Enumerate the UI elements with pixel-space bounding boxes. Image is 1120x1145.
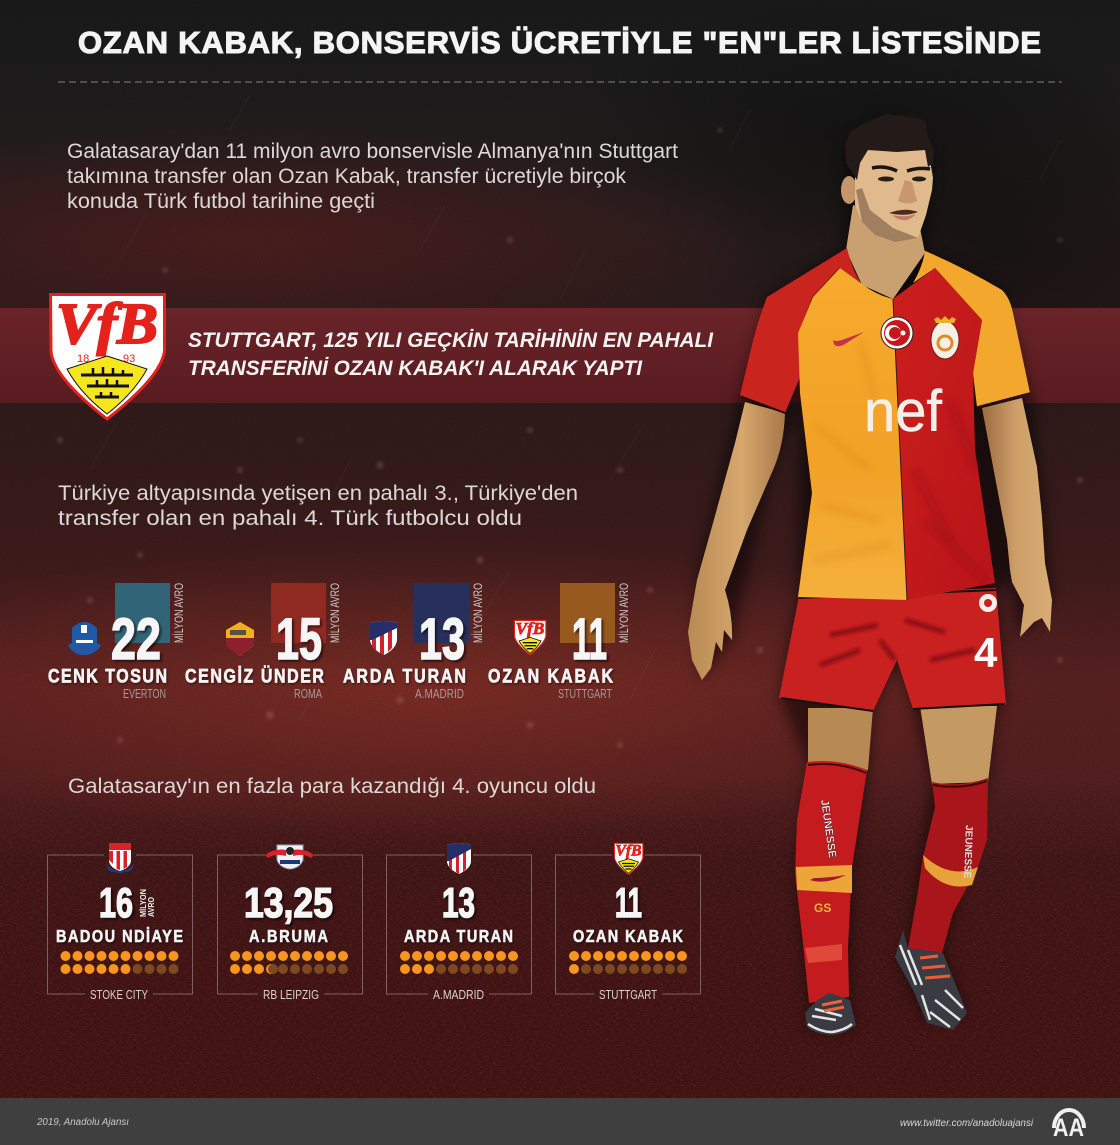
right sleeve bbox=[913, 250, 1030, 407]
icon: VfB crest bbox=[514, 619, 546, 655]
card: Badou Ndiaye bbox=[48, 843, 192, 1002]
panel: Cengiz Ünder: CENGİZ ÜNDER bbox=[185, 665, 324, 687]
dots: 13 of 20 scale bbox=[400, 951, 518, 974]
dots: 11 of 20 scale bbox=[569, 951, 687, 974]
face bbox=[855, 148, 933, 242]
card: A.Bruma: 13,25 bbox=[244, 879, 333, 926]
footer bbox=[0, 1098, 1120, 1145]
card: Arda Turan: 13 bbox=[442, 879, 475, 926]
icon: RB Leipzig crest bbox=[265, 845, 314, 869]
icon: Stoke crest bbox=[106, 843, 134, 873]
icon: VfB crest small bbox=[614, 842, 643, 874]
left sleeve bbox=[740, 248, 862, 413]
Turkish flag badge bbox=[881, 317, 913, 349]
panel: Cengiz Ünder: MİLYON AVRO bbox=[329, 583, 342, 643]
right sock: JEUNESSE bbox=[961, 825, 974, 879]
right boot bbox=[895, 930, 967, 1030]
card: Badou Ndiaye: 16 bbox=[99, 879, 133, 926]
section text: Galatasaray sales: Galatasaray'ın en fazla para kazandığı 4. oyuncu oldu bbox=[68, 774, 596, 798]
left arm bbox=[688, 402, 785, 680]
panel: Arda Turan: MİLYON AVRO bbox=[472, 583, 485, 643]
right arm bbox=[982, 398, 1052, 637]
card: Badou Ndiaye: STOKE CITY bbox=[90, 987, 148, 1002]
left knee bbox=[808, 708, 873, 770]
card: Arda Turan: A.MADRID bbox=[433, 987, 484, 1002]
dots: 16 of 20 scale bbox=[60, 951, 178, 974]
intro text: takımına transfer olan Ozan Kabak, transfer ücretiyle birçok bbox=[67, 165, 627, 188]
panel: Ozan Kabak: MİLYON AVRO bbox=[618, 583, 631, 643]
panel: Cengiz Ünder: 15 bbox=[276, 607, 322, 672]
nike swoosh bbox=[833, 332, 864, 346]
icon: VfB crest small: VfB bbox=[616, 842, 642, 860]
right knee bbox=[920, 706, 997, 784]
icon: VfB Stuttgart crest large bbox=[50, 291, 164, 419]
Galatasaray badge bbox=[931, 316, 959, 359]
hair bbox=[845, 114, 934, 180]
icon: Roma crest bbox=[226, 622, 254, 656]
banner text bbox=[188, 329, 714, 380]
intro text bbox=[67, 140, 678, 213]
left sock: GS bbox=[814, 901, 831, 915]
panel: Ozan Kabak bbox=[488, 583, 631, 701]
panel: Cengiz Ünder: ROMA bbox=[294, 686, 322, 701]
panel: Cenk Tosun: 22 bbox=[111, 607, 161, 672]
panel: Cenk Tosun: MİLYON AVRO bbox=[173, 583, 186, 643]
card: Ozan Kabak: OZAN KABAK bbox=[573, 928, 683, 946]
ear bbox=[841, 176, 857, 204]
sponsor nef: nef bbox=[864, 379, 943, 444]
icon: VfB Stuttgart crest large: VfB bbox=[56, 291, 158, 356]
footer: 2019, Anadolu Ajansı bbox=[36, 1117, 129, 1128]
icon: VfB crest: VfB bbox=[516, 619, 544, 638]
panel: Cenk Tosun: EVERTON bbox=[123, 686, 166, 701]
icon: Atletico crest bbox=[370, 621, 397, 655]
icon: Everton crest bbox=[68, 622, 101, 655]
section text: most expensive Turkish bbox=[58, 481, 578, 530]
section text: most expensive Turkish: transfer olan en pahalı 4. Türk futbolcu oldu bbox=[58, 506, 522, 530]
section text: most expensive Turkish: Türkiye altyapısında yetişen en pahalı 3., Türkiye'den bbox=[58, 481, 578, 505]
card: Badou Ndiaye: MİLYON bbox=[138, 889, 148, 917]
neck bbox=[846, 205, 925, 299]
panel: Cenk Tosun bbox=[48, 583, 186, 701]
jersey orange half bbox=[798, 268, 907, 600]
card: Ozan Kabak: 11 bbox=[615, 879, 642, 926]
panel: Arda Turan bbox=[343, 583, 485, 701]
intro text: Galatasaray'dan 11 milyon avro bonservisle Almanya'nın Stuttgart bbox=[67, 140, 678, 163]
icon: VfB Stuttgart crest large: 93 bbox=[123, 353, 135, 365]
panel: Cengiz Ünder bbox=[185, 583, 342, 701]
banner text: TRANSFERİNİ OZAN KABAK'I ALARAK YAPTI bbox=[188, 357, 643, 380]
banner text: STUTTGART, 125 YILI GEÇKİN TARİHİNİN EN PAHALI bbox=[188, 329, 714, 352]
intro text: konuda Türk futbol tarihine geçti bbox=[67, 190, 375, 213]
icon: Anadolu Agency logo: AA bbox=[1053, 1114, 1084, 1142]
shorts bbox=[779, 588, 1006, 711]
icon: VfB Stuttgart crest large: 18 bbox=[77, 353, 89, 365]
dots: 13,25 of 20 scale bbox=[230, 951, 348, 974]
card: Arda Turan: ARDA TURAN bbox=[404, 928, 513, 946]
right sock bbox=[908, 778, 988, 953]
panel: Ozan Kabak: STUTTGART bbox=[558, 686, 612, 701]
jersey red half bbox=[893, 268, 995, 600]
card: Ozan Kabak: STUTTGART bbox=[599, 987, 657, 1002]
icon: Atletico crest small bbox=[447, 843, 471, 874]
shorts: 4 bbox=[974, 629, 998, 676]
panel: Arda Turan: A.MADRID bbox=[415, 686, 464, 701]
left boot bbox=[805, 993, 856, 1035]
left sock bbox=[795, 761, 867, 1003]
player illustration bbox=[688, 114, 1052, 1035]
card: Badou Ndiaye: BADOU NDİAYE bbox=[56, 927, 183, 946]
card: Arda Turan bbox=[386, 843, 532, 1002]
panel: Ozan Kabak: 11 bbox=[572, 607, 607, 672]
banner bbox=[0, 308, 1120, 403]
card: A.Bruma bbox=[218, 845, 362, 1002]
left sock: JEUNESSE bbox=[818, 799, 838, 859]
card: A.Bruma: RB LEIPZIG bbox=[263, 987, 319, 1002]
panel: Cenk Tosun: CENK TOSUN bbox=[48, 665, 167, 687]
panel: Ozan Kabak: OZAN KABAK bbox=[488, 665, 613, 687]
panel: Arda Turan: ARDA TURAN bbox=[343, 665, 466, 687]
title: OZAN KABAK, BONSERVİS ÜCRETİYLE "EN"LER LİSTESİNDE bbox=[78, 25, 1041, 60]
panel: Arda Turan: 13 bbox=[419, 607, 465, 672]
card: Badou Ndiaye: AVRO bbox=[146, 897, 156, 917]
card: Ozan Kabak bbox=[556, 842, 700, 1002]
card: A.Bruma: A.BRUMA bbox=[249, 928, 328, 946]
footer: www.twitter.com/anadoluajansi bbox=[900, 1117, 1034, 1129]
